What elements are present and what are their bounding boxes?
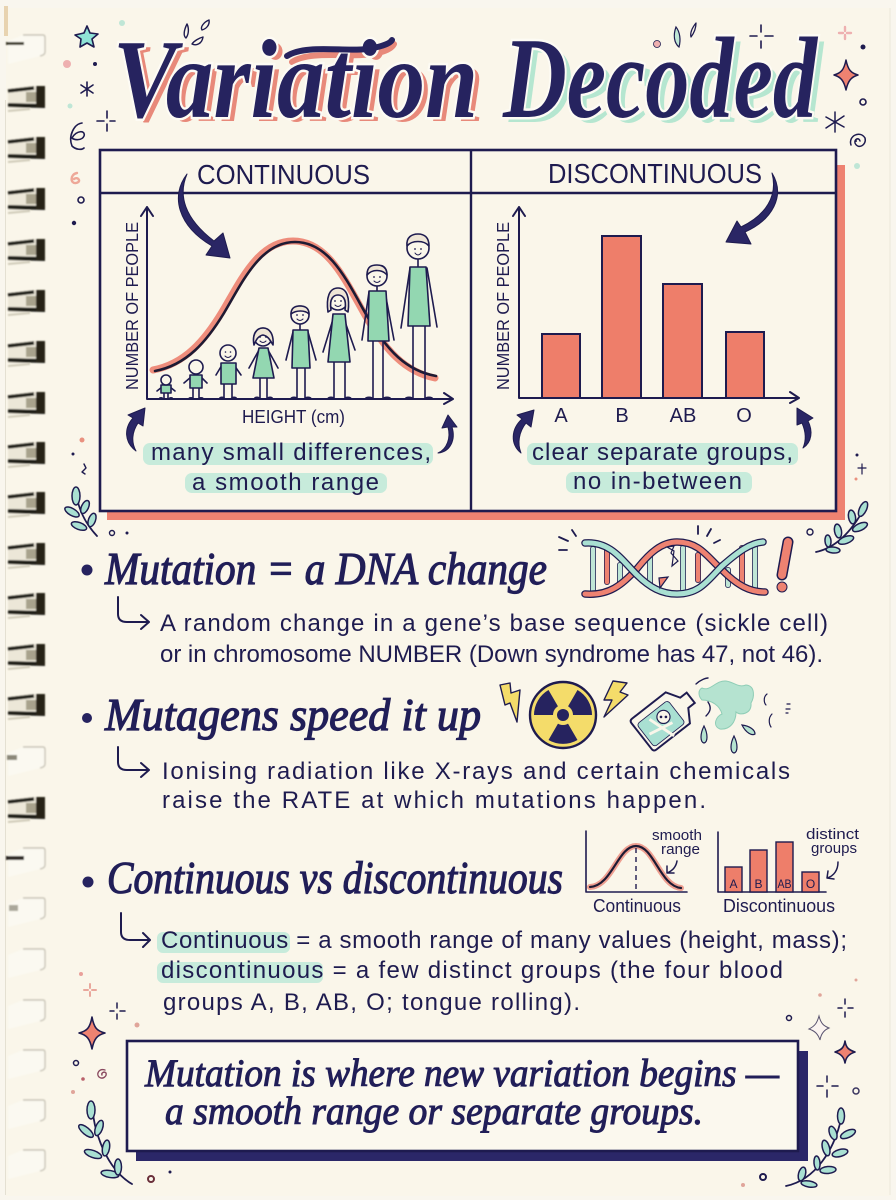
- icon: DNA helix: [559, 526, 765, 594]
- mini chart: continuous: [586, 827, 702, 916]
- arrow: continuous header to curve: [178, 174, 230, 258]
- title: Variation: [113, 18, 478, 142]
- mini chart: discontinuous: groups: [811, 840, 857, 857]
- body text: Ionising radiation like X-rays and certain chemicals: [162, 758, 790, 785]
- bar labels: A: [554, 405, 568, 427]
- mini chart: continuous: Continuous: [593, 896, 681, 916]
- mini chart: discontinuous: [718, 826, 860, 916]
- body text: A random change in a gene’s base sequence (sickle cell): [160, 610, 828, 637]
- bar labels: O: [736, 405, 752, 427]
- bars: [542, 236, 764, 398]
- icon: poison bottle: [629, 682, 703, 752]
- chart: bell curve with growing people: [122, 207, 453, 427]
- section: continuous vs discontinuous: [82, 852, 847, 1016]
- bar labels: [554, 405, 752, 427]
- heading: continuous: CONTINUOUS: [197, 159, 370, 190]
- section: continuous vs discontinuous: discontinuous = a few distinct groups (the four blood: [161, 957, 783, 984]
- mini chart: discontinuous: B: [754, 877, 763, 891]
- heading: Continuous vs discontinuous: [107, 852, 563, 903]
- mini chart: discontinuous: distinct: [806, 826, 860, 843]
- caption: continuous: many small differences,: [151, 439, 431, 466]
- decoration: left leaf sprig: [63, 487, 98, 536]
- mini chart: continuous: smooth: [652, 827, 702, 844]
- bullet: [82, 564, 92, 576]
- icon: radiation symbol: [530, 682, 596, 748]
- callout: summary box: a smooth range or separate groups.: [165, 1090, 703, 1133]
- heading: Mutation = a DNA change: [104, 543, 547, 594]
- chart: blood group bars: [493, 207, 799, 427]
- arrows: discontinuous caption: [513, 408, 813, 453]
- section: mutation: [82, 543, 828, 668]
- hook arrow: [118, 597, 149, 629]
- title: [113, 15, 825, 148]
- arrows: continuous caption: [127, 408, 457, 453]
- bullet: [82, 876, 94, 888]
- mini chart: discontinuous: Discontinuous: [723, 896, 835, 916]
- heading: Mutagens speed it up: [104, 689, 481, 740]
- hook arrow: [121, 913, 150, 947]
- section: mutagens: raise the RATE at which mutations happen.: [162, 787, 706, 814]
- caption: discontinuous: [527, 439, 798, 495]
- decoration: right leaf sprig: [807, 500, 870, 554]
- title: Variation: [119, 22, 484, 146]
- caption: continuous: a smooth range: [192, 469, 379, 496]
- title: Variation: [113, 18, 478, 142]
- callout: summary box: [127, 1041, 808, 1161]
- y-axis label: NUMBER OF PEOPLE: [122, 222, 142, 390]
- heading: discontinuous: DISCONTINUOUS: [548, 158, 762, 189]
- arrow: discontinuous header to bars: [726, 173, 778, 244]
- box shadow: [136, 1051, 808, 1161]
- decoration: bottom-right leaf sprig: [786, 1108, 857, 1188]
- section: mutagens: [82, 689, 790, 814]
- icon: exclamation mark: [777, 542, 788, 592]
- mini chart: continuous: range: [661, 841, 700, 858]
- body text: Continuous = a smooth range of many values (height, mass);: [161, 927, 847, 954]
- people figures: [157, 234, 437, 400]
- icon: lightning bolts: [500, 681, 628, 722]
- hook arrow: [118, 747, 149, 777]
- caption: discontinuous: no in-between: [573, 468, 742, 495]
- caption: continuous: [143, 439, 433, 496]
- section: mutation: or in chromosome NUMBER (Down syndrome has 47, not 46).: [160, 641, 823, 668]
- section: continuous vs discontinuous: groups A, B, AB, O; tongue rolling).: [163, 989, 580, 1016]
- mini chart: discontinuous: O: [806, 877, 815, 891]
- panel: comparison table: [100, 150, 845, 520]
- decoration: bottom-left leaf sprig: [77, 1101, 132, 1184]
- decorations: top doodles: [63, 20, 866, 149]
- highlights: [157, 932, 323, 983]
- x-axis label: HEIGHT (cm): [242, 407, 345, 427]
- icon: chemical splash: [696, 678, 790, 753]
- mini chart: discontinuous: AB: [778, 877, 792, 891]
- panel shadow: [107, 165, 845, 520]
- decorations: bottom-left doodles: [71, 972, 172, 1182]
- bullet: [82, 713, 92, 723]
- decorations: panel side doodles: [72, 163, 866, 536]
- bell curve: [153, 241, 436, 378]
- bar labels: AB: [670, 405, 696, 427]
- caption: discontinuous: clear separate groups,: [532, 439, 793, 466]
- y-axis label: NUMBER OF PEOPLE: [493, 222, 513, 390]
- decorations: bottom-right doodles: [741, 978, 859, 1187]
- bar labels: B: [615, 405, 629, 427]
- spiral binding: [6, 35, 45, 1179]
- mini chart: discontinuous: A: [729, 877, 738, 891]
- summary text: Mutation is where new variation begins —: [144, 1052, 779, 1095]
